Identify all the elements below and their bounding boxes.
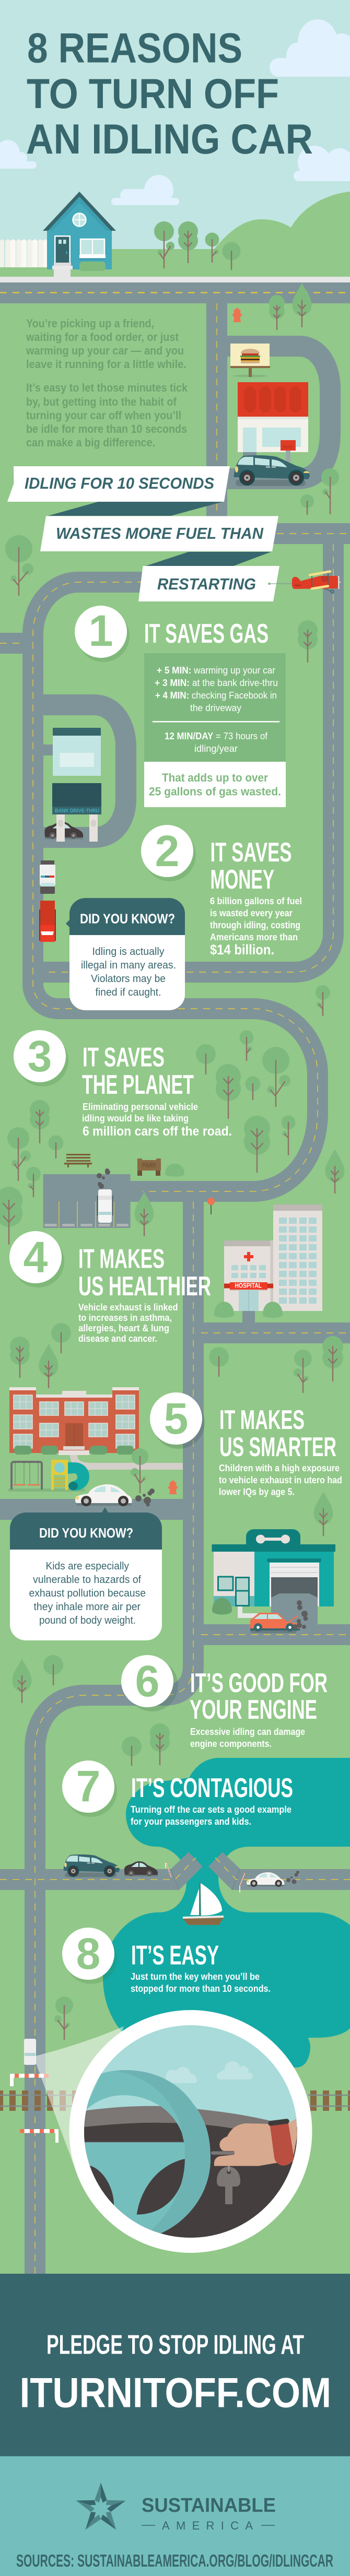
reason 3 number badge: 3 xyxy=(28,1032,52,1081)
crossing gate upper xyxy=(10,2074,49,2086)
reason 7 text: Turning off the car sets a good example xyxy=(131,1804,291,1815)
park bench xyxy=(64,1154,92,1167)
tree xyxy=(122,1736,142,1765)
did you know panel 1: Idling is actually xyxy=(92,946,164,958)
fast food restaurant xyxy=(238,382,308,462)
reason 4 text: to increases in asthma, xyxy=(78,1313,172,1323)
did you know panel 1: DID YOU KNOW? xyxy=(80,911,175,926)
magnified view: hand turning off ignition xyxy=(69,2010,312,2253)
school building xyxy=(9,1387,139,1455)
bank drive-thru: BANK DRIVE-THRU xyxy=(55,808,99,814)
title: 8 REASONS xyxy=(27,25,242,72)
did you know panel 2: vulnerable to hazards of xyxy=(33,1574,141,1586)
reason 2 number badge: 2 xyxy=(155,826,179,876)
bridge road xyxy=(0,1852,350,1890)
reason 2 number badge xyxy=(141,825,196,881)
reason 4 text: Vehicle exhaust is linked xyxy=(78,1302,178,1313)
playground: slide xyxy=(51,1460,89,1491)
tree xyxy=(154,221,174,268)
hydrant xyxy=(232,308,242,322)
ribbon: wastes more fuel than: WASTES MORE FUEL THAN xyxy=(56,524,264,542)
panel: idling minutes: the driveway xyxy=(190,703,241,713)
white ambulance top view xyxy=(40,860,55,894)
reason 7 text xyxy=(131,1804,291,1827)
reason 5 number badge xyxy=(150,1392,205,1449)
tree xyxy=(321,468,339,514)
tree xyxy=(54,1996,73,2039)
biplane xyxy=(268,571,341,593)
tree xyxy=(48,1135,64,1158)
reason 8 number badge: 8 xyxy=(76,1929,100,1978)
billboard: burger xyxy=(230,344,270,377)
panel: idling minutes: + 3 MIN: at the bank drive-thru xyxy=(155,678,278,688)
reason 3 heading: THE PLANET xyxy=(82,1070,194,1100)
reason 6 text xyxy=(190,1727,305,1749)
reason 3 text: idling would be like taking xyxy=(82,1113,189,1124)
beetle in traffic with smoke xyxy=(247,1871,299,1887)
intro text: waiting for a food order, or just xyxy=(26,330,179,344)
reason 3 text: 6 million cars off the road. xyxy=(83,1124,232,1139)
in-car view clouds xyxy=(165,2061,253,2083)
tree xyxy=(131,1448,148,1493)
bridge gate left xyxy=(166,1862,171,1877)
intro text: turning your car off when you’ll xyxy=(26,409,181,422)
reason 7 text: for your passengers and kids. xyxy=(131,1816,251,1827)
intro text: It’s easy to let those minutes tick xyxy=(26,381,188,394)
tree xyxy=(300,494,314,514)
red truck top view xyxy=(39,901,56,942)
reason 6 number badge xyxy=(121,1655,178,1711)
school path xyxy=(74,1455,89,1466)
reason 8 number badge xyxy=(62,1928,117,1984)
roads: street network xyxy=(0,293,350,2274)
tree xyxy=(239,1031,254,1060)
broken-down orange car with smoke xyxy=(250,1600,308,1633)
tree xyxy=(269,295,285,329)
intro text xyxy=(26,317,188,449)
panel: idling minutes: That adds up to over xyxy=(162,771,268,784)
reason 6 text: engine components. xyxy=(190,1739,272,1749)
logo: star xyxy=(76,2483,126,2530)
cloud: centre xyxy=(111,175,179,205)
ribbon: restarting xyxy=(138,566,279,601)
panel: idling minutes: idling/year xyxy=(194,743,238,754)
car top view at crossing xyxy=(24,2039,36,2065)
tree xyxy=(26,1167,41,1197)
title: TO TURN OFF xyxy=(27,70,279,117)
reason 4 heading: IT MAKES xyxy=(78,1244,165,1274)
intro text: You’re picking up a friend, xyxy=(26,317,154,330)
reason 2 text: is wasted every year xyxy=(210,908,293,918)
river / lake xyxy=(103,1758,350,2067)
reason 5 number badge: 5 xyxy=(164,1394,188,1443)
tree xyxy=(281,1115,296,1155)
cloud: top right xyxy=(270,19,350,77)
minivan at drive-thru xyxy=(234,455,310,486)
tree xyxy=(5,535,33,595)
reason 4 text xyxy=(78,1302,178,1344)
tree xyxy=(10,1337,30,1377)
reason 1 number badge: 1 xyxy=(89,606,113,655)
reason 6 text: Excessive idling can damage xyxy=(190,1727,305,1737)
reason 3 number badge xyxy=(14,1030,68,1086)
ribbon: wastes more fuel than xyxy=(40,516,278,566)
tree xyxy=(0,1187,22,1244)
hand and sleeve xyxy=(214,2119,297,2166)
panel: idling minutes xyxy=(144,653,286,807)
title: AN IDLING CAR xyxy=(26,116,313,163)
did you know panel 2: DID YOU KNOW? xyxy=(39,1525,133,1541)
reason 4 heading: US HEALTHIER xyxy=(78,1271,211,1302)
reason 6 number badge: 6 xyxy=(135,1657,159,1706)
picket fence xyxy=(0,239,48,267)
background: sky xyxy=(0,0,350,292)
hospital: HOSPITAL xyxy=(235,1281,262,1290)
tree xyxy=(135,1192,154,1236)
ribbon: idling for 10 seconds: IDLING FOR 10 SECONDS xyxy=(25,474,214,492)
did you know panel 1: Violators may be xyxy=(91,973,166,985)
tree xyxy=(293,283,311,327)
reason 5 heading: IT MAKES xyxy=(219,1405,305,1435)
intro text: can make a big difference. xyxy=(26,436,155,449)
reason 8 text: Just turn the key when you’ll be xyxy=(131,1971,260,1982)
dark car in traffic xyxy=(124,1861,158,1876)
reason 5 heading xyxy=(219,1405,336,1462)
reason 2 heading: MONEY xyxy=(210,865,274,895)
reason 1 number badge xyxy=(75,606,130,662)
tree xyxy=(13,1659,31,1703)
reason 2 text: through idling, costing xyxy=(210,920,300,930)
reason 2 heading xyxy=(210,837,291,895)
park sign xyxy=(137,1159,161,1176)
reason 8 heading: IT’S EASY xyxy=(131,1940,219,1970)
logo: wordmark xyxy=(142,2495,276,2532)
reason 2 text: Americans more than xyxy=(210,932,298,942)
reason 3 heading xyxy=(82,1042,194,1100)
did you know panel 2: pound of body weight. xyxy=(39,1615,136,1626)
tree xyxy=(316,985,330,1015)
sidewalk xyxy=(0,277,350,282)
tree xyxy=(150,1723,170,1765)
tree xyxy=(262,1047,290,1106)
crossing gate lower xyxy=(20,2129,59,2143)
road centre lines xyxy=(0,292,350,2274)
reason 2 text: $14 billion. xyxy=(210,942,274,958)
tree xyxy=(39,1344,59,1388)
tree xyxy=(196,1044,216,1074)
park sign: PARK xyxy=(142,1162,156,1169)
tree xyxy=(294,1350,312,1392)
tree xyxy=(313,1492,333,1535)
intro text: leave it running for a little while. xyxy=(26,358,186,371)
playground: swing set xyxy=(8,1462,85,1492)
reason 8 text: stopped for more than 10 seconds. xyxy=(131,1983,271,1994)
title xyxy=(26,25,313,163)
cloud: right xyxy=(294,146,350,181)
hospital xyxy=(214,1204,322,1318)
reason 4 number badge: 4 xyxy=(24,1233,48,1282)
reason 3 heading: IT SAVES xyxy=(83,1042,165,1072)
footer band xyxy=(0,2456,350,2576)
bridge gate right xyxy=(240,1873,245,1893)
reason 4 text: disease and cancer. xyxy=(78,1333,157,1344)
tree xyxy=(178,221,198,263)
tree xyxy=(298,620,318,662)
reason 4 heading xyxy=(78,1244,211,1302)
railroad tracks xyxy=(0,2090,350,2111)
reason 7 number badge xyxy=(62,1760,117,1817)
reason 2 text: 6 billion gallons of fuel xyxy=(210,896,302,906)
idling bus with smoke xyxy=(97,1168,113,1223)
hydrant xyxy=(168,1480,178,1494)
reason 8 text xyxy=(131,1971,271,1994)
intro text: by, but getting into the habit of xyxy=(26,395,177,408)
beetle with exhaust smoke xyxy=(75,1484,155,1507)
reason 4 text: allergies, heart & lung xyxy=(78,1323,169,1333)
reason 2 heading: IT SAVES xyxy=(210,837,291,868)
intro text: be idle for more than 10 seconds xyxy=(26,422,187,435)
tree xyxy=(43,1655,63,1685)
reason 3 text: Eliminating personal vehicle xyxy=(83,1102,198,1112)
stop sign xyxy=(207,1198,215,1214)
tree xyxy=(205,233,219,262)
reason 5 text xyxy=(219,1463,342,1497)
reason 7 number badge: 7 xyxy=(76,1762,100,1811)
parking lot markings xyxy=(44,1201,129,1227)
panel: idling minutes: 12 MIN/DAY = 73 hours of xyxy=(165,731,268,741)
ignition key xyxy=(217,2167,240,2204)
panel: idling minutes: + 5 MIN: warming up your car xyxy=(157,665,275,676)
magnifier beam xyxy=(36,2026,124,2165)
did you know panel 2: exhaust pollution because xyxy=(29,1588,146,1599)
reason 4 number badge xyxy=(9,1231,64,1287)
did you know panel 2: Kids are especially xyxy=(46,1561,129,1572)
tree xyxy=(246,1077,260,1100)
tree xyxy=(223,242,240,269)
reason 3 text xyxy=(82,1102,232,1139)
ribbon: idling for 10 seconds xyxy=(7,466,230,516)
reason 5 text: Children with a high exposure xyxy=(219,1463,340,1473)
tree xyxy=(216,1064,241,1118)
tree xyxy=(51,1323,71,1353)
ribbon: restarting: RESTARTING xyxy=(157,575,256,593)
did you know panel 1: illegal in many areas. xyxy=(81,960,176,971)
house xyxy=(43,192,116,277)
did you know panel 2 xyxy=(10,1507,162,1640)
logo: wordmark: SUSTAINABLE xyxy=(142,2495,276,2516)
did you know panel 2: they inhale more air per xyxy=(33,1601,141,1613)
tree xyxy=(244,1116,270,1172)
tree xyxy=(30,1100,50,1143)
panel: idling minutes: + 4 MIN: checking Facebook in xyxy=(155,690,277,701)
intro text: warming up your car — and you xyxy=(26,344,184,357)
reason 2 text xyxy=(210,896,302,958)
cloud: left xyxy=(0,140,37,169)
panel: idling minutes: 25 gallons of gas wasted. xyxy=(149,785,281,798)
tree xyxy=(7,1127,31,1180)
call to action band xyxy=(0,2274,350,2456)
auto repair garage xyxy=(212,1529,335,1625)
tree xyxy=(209,1347,229,1376)
bush xyxy=(165,1164,184,1177)
tree xyxy=(322,1336,343,1381)
reason 1 heading: IT SAVES GAS xyxy=(144,619,269,649)
reason 6 heading xyxy=(190,1668,328,1725)
did you know panel 1: fined if caught. xyxy=(95,987,161,998)
logo: wordmark: AMERICA xyxy=(162,2519,253,2532)
did you know panel 1 xyxy=(66,898,185,1010)
bank drive-thru xyxy=(45,728,101,842)
tree xyxy=(325,1149,345,1193)
reason 5 text: lower IQs by age 5. xyxy=(219,1487,295,1497)
minivan in traffic xyxy=(63,1854,120,1877)
sailboat xyxy=(183,1883,224,1925)
